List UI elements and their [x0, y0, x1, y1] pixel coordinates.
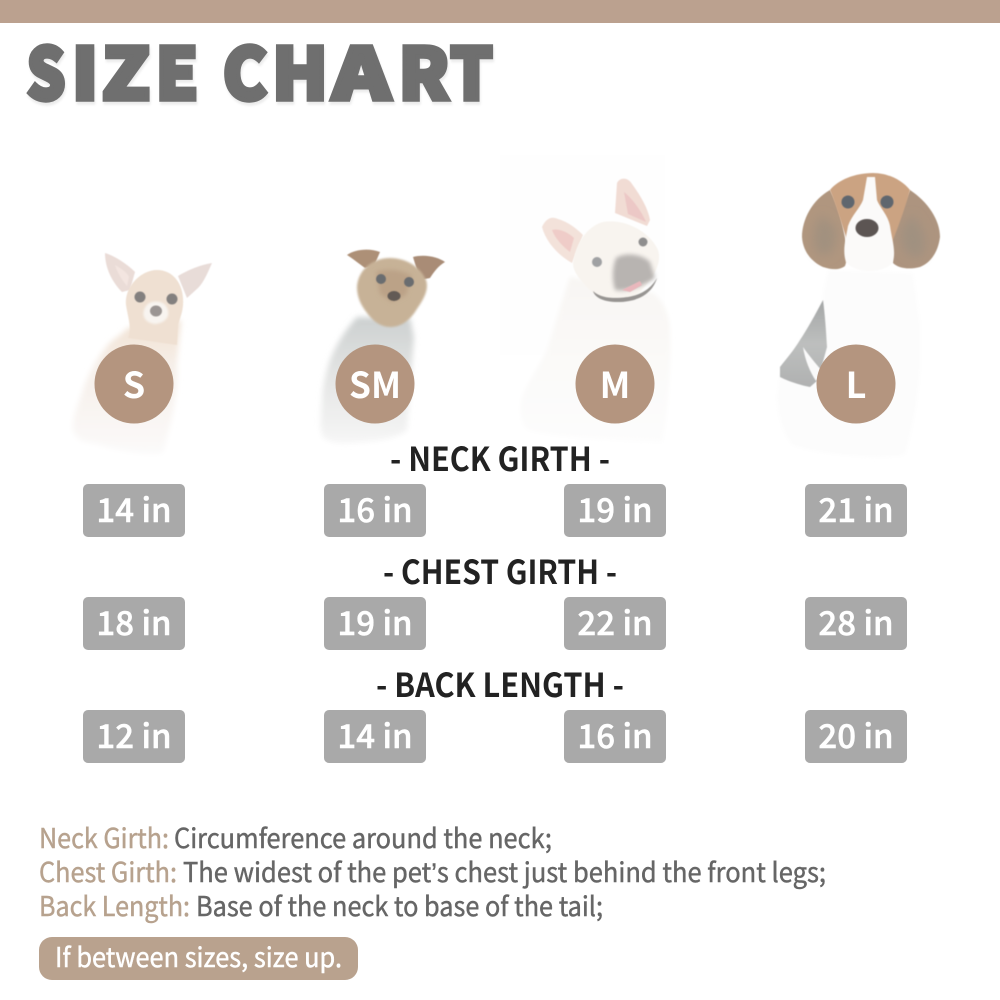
definition: back length: Base of the neck to base of the tail;	[196, 885, 603, 924]
row: chest girth values: 28 in	[818, 597, 894, 645]
size badge: M: M	[600, 357, 630, 409]
dog photo: french bulldog, size M	[500, 155, 671, 443]
row: neck girth values: 14 in	[96, 484, 172, 532]
top band	[0, 0, 1000, 23]
dog photo: chihuahua, size S	[73, 253, 212, 454]
definition: neck girth: Neck Girth:	[39, 817, 169, 856]
title: S	[26, 18, 66, 120]
title: H	[272, 18, 328, 120]
row: back length values	[83, 710, 907, 763]
title: I	[72, 18, 98, 120]
title: A	[331, 18, 392, 120]
title: T	[450, 18, 493, 120]
title: R	[398, 18, 450, 120]
row: chest girth values: 19 in	[337, 597, 413, 645]
size badge: S	[94, 344, 174, 424]
row: neck girth values: 19 in	[577, 484, 653, 532]
size badge: SM	[336, 344, 414, 424]
definition: chest girth: The widest of the pet’s chest just behind the front legs;	[183, 851, 826, 890]
title: E	[156, 18, 198, 120]
row: back length values: 16 in	[577, 710, 653, 758]
title: Z	[102, 18, 150, 120]
row: chest girth values	[83, 597, 907, 650]
callout: sizing advice: If between sizes, size up.	[55, 936, 342, 975]
title	[26, 18, 493, 120]
size badge: L: L	[846, 357, 866, 409]
heading: neck girth: - NECK GIRTH -	[390, 433, 610, 481]
row: neck girth values: 21 in	[818, 484, 894, 532]
row: neck girth values: 16 in	[337, 484, 413, 532]
definition: chest girth: Chest Girth:	[39, 851, 177, 890]
size badge: L	[816, 344, 896, 424]
size badge: S: S	[123, 357, 145, 409]
dog photo: beagle, size L	[777, 173, 940, 457]
row: chest girth values: 22 in	[577, 597, 653, 645]
row: back length values: 14 in	[337, 710, 413, 758]
title: C	[223, 18, 267, 120]
heading: back length: - BACK LENGTH -	[376, 659, 624, 707]
definition: back length	[39, 885, 603, 924]
row: chest girth values: 18 in	[96, 597, 172, 645]
dog photo: yorkshire terrier, size SM	[321, 250, 445, 443]
row: neck girth values	[83, 484, 907, 537]
row: back length values: 20 in	[818, 710, 894, 758]
size badge: M	[576, 344, 654, 424]
heading: chest girth: - CHEST GIRTH -	[383, 546, 617, 594]
definition: neck girth: Circumference around the neck;	[174, 817, 552, 856]
size badge: SM: SM	[349, 357, 401, 409]
row: back length values: 12 in	[96, 710, 172, 758]
definition: back length: Back Length:	[39, 885, 190, 924]
